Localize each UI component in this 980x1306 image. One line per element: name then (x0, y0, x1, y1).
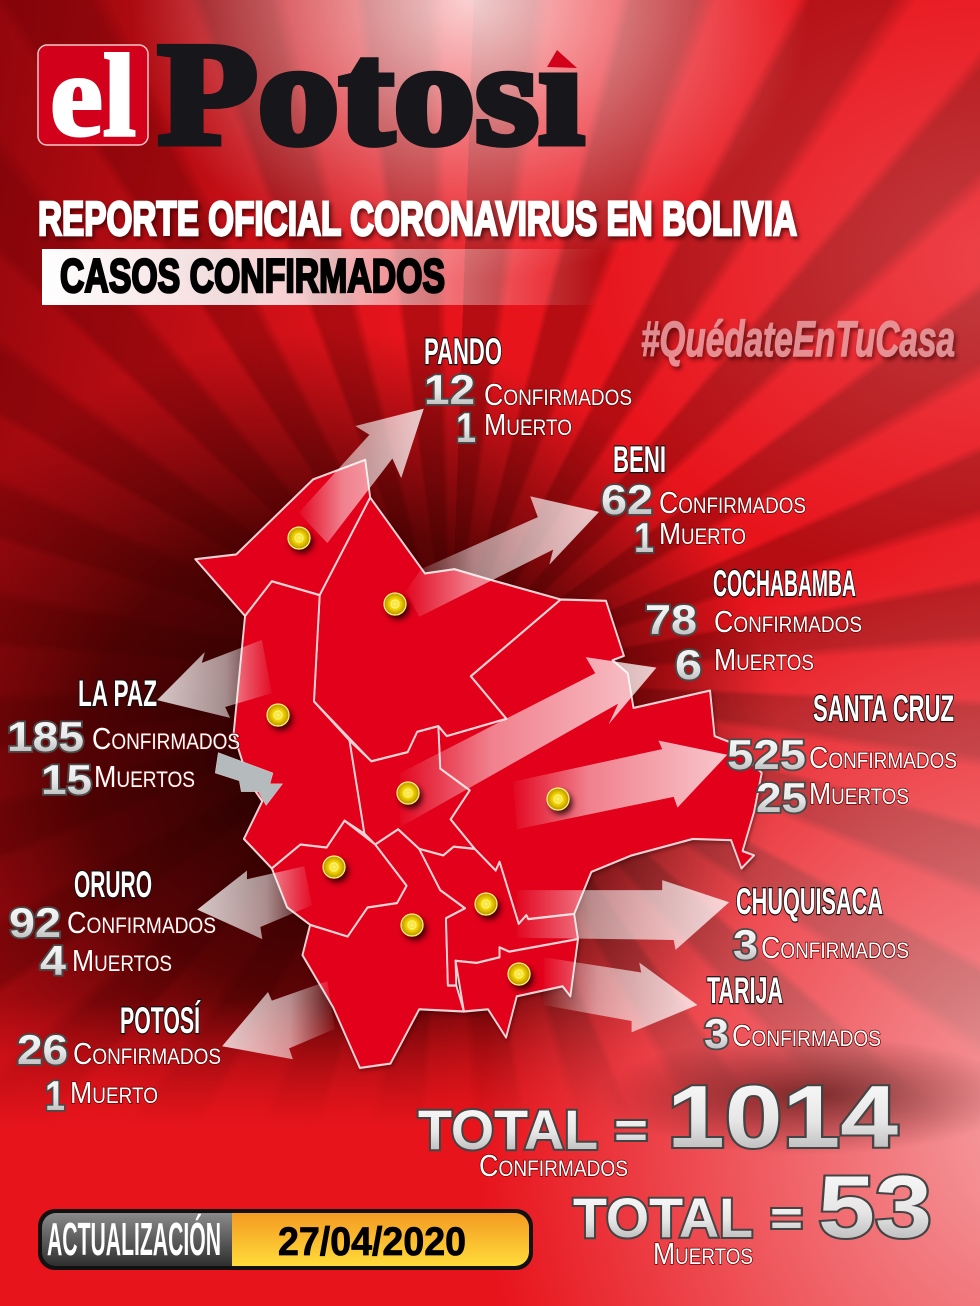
label: Cochabamba (645, 563, 862, 688)
label: Tarija: 3 (704, 1010, 729, 1057)
arrow: Oruro (197, 866, 312, 939)
label: Santa Cruz: 525 (727, 731, 806, 778)
region: Chuquisaca (419, 847, 578, 985)
label: Pando: Confirmados (484, 377, 632, 412)
marker: Pando (288, 527, 310, 549)
label: Cochabamba: COCHABAMBA (713, 563, 856, 604)
label: Oruro: Muertos (72, 943, 172, 978)
label: La Paz: 15 (41, 756, 92, 803)
label: Potosí: POTOSÍ (120, 1000, 201, 1041)
label: Pando: PANDO (424, 331, 502, 372)
region: Tarija (456, 939, 578, 1038)
label: Beni (601, 439, 806, 561)
label: Beni: 62 (601, 476, 653, 523)
total confirmed: 1014 (667, 1067, 898, 1166)
marker: Chuquisaca (475, 893, 497, 915)
label: Santa Cruz: Confirmados (809, 740, 957, 775)
label: Oruro: 4 (40, 937, 67, 984)
label: Chuquisaca: CHUQUISACA (736, 881, 883, 922)
label: Tarija (704, 970, 881, 1057)
label: Beni: BENI (613, 439, 666, 480)
total deaths: TOTAL (573, 1186, 753, 1249)
arrow: Santa Cruz (513, 740, 727, 829)
label: Potosí: Muerto (70, 1075, 158, 1110)
region: Oruro (272, 821, 407, 936)
logo: el Potosí (37, 44, 586, 148)
arrow: Chuquisaca (517, 880, 729, 950)
department markers (267, 527, 569, 985)
label: Tarija: Confirmados (732, 1018, 881, 1053)
region: Santa Cruz (438, 600, 762, 924)
label: La Paz (7, 673, 240, 803)
marker: Santa Cruz (547, 788, 569, 810)
update date bar: ACTUALIZACIÓN (47, 1213, 221, 1265)
marker: Potosí (401, 914, 423, 936)
label: Tarija: TARIJA (707, 970, 783, 1011)
total deaths: 53 (818, 1157, 932, 1256)
label: La Paz: 185 (7, 713, 84, 760)
region: La Paz (234, 581, 364, 868)
update date bar (38, 1209, 533, 1270)
marker: La Paz (267, 704, 289, 726)
label: Cochabamba: Confirmados (714, 604, 862, 639)
label: Oruro: Confirmados (67, 905, 216, 940)
marker: Beni (384, 593, 406, 615)
label: Oruro: ORURO (74, 864, 152, 905)
arrow: Beni (406, 496, 599, 617)
label: Santa Cruz (727, 688, 957, 821)
label: Oruro (9, 864, 216, 984)
label: Pando: 12 (424, 366, 475, 413)
label: Chuquisaca: Confirmados (761, 930, 909, 965)
total confirmed: = (614, 1102, 648, 1158)
map of Bolivia (195, 460, 762, 1068)
arrow: La Paz (157, 640, 272, 718)
arrow: Potosí (222, 981, 335, 1059)
logo: el Potosí: el (50, 30, 136, 161)
lake shape (215, 753, 283, 806)
region: Pando (195, 460, 370, 616)
label: Chuquisaca (733, 881, 909, 968)
arrow: Cochabamba (400, 657, 656, 827)
arrow: Tarija (544, 957, 697, 1032)
region: Cochabamba (350, 726, 475, 855)
total deaths (573, 1157, 932, 1271)
label: Pando: Muerto (484, 407, 572, 442)
total confirmed: TOTAL (418, 1098, 598, 1161)
total confirmed (418, 1067, 898, 1183)
label: La Paz: Confirmados (92, 721, 240, 756)
label: Potosí: 26 (17, 1026, 68, 1073)
label: Santa Cruz: 25 (756, 774, 807, 821)
label: Cochabamba: 78 (645, 596, 697, 643)
label: Potosí: Confirmados (73, 1036, 221, 1071)
arrows (157, 409, 729, 1059)
label: Cochabamba: Muertos (714, 642, 814, 677)
update date bar: 27/04/2020 (278, 1220, 466, 1264)
label: Beni: 1 (634, 514, 654, 561)
marker: Oruro (323, 856, 345, 878)
region: Beni (314, 498, 561, 761)
label: Pando: 1 (456, 404, 476, 451)
label: Oruro: 92 (9, 899, 61, 946)
label: Cochabamba: 6 (675, 641, 702, 688)
label: Potosí (17, 1000, 221, 1119)
total confirmed: Confirmados (479, 1148, 628, 1183)
marker: Cochabamba (397, 782, 419, 804)
marker: Tarija (508, 963, 530, 985)
subtitle band: CASOS CONFIRMADOS (60, 249, 445, 302)
label: La Paz: LA PAZ (78, 673, 157, 714)
label: Beni: Muerto (659, 516, 746, 551)
logo: el Potosí: Potosí (158, 13, 587, 175)
arrow: Pando (299, 409, 424, 543)
total deaths: Muertos (653, 1236, 753, 1271)
region: Potosí (302, 829, 465, 1068)
label: Pando (424, 331, 632, 451)
label: Santa Cruz: Muertos (809, 776, 909, 811)
label: La Paz: Muertos (94, 759, 195, 794)
label: Beni: Confirmados (659, 485, 806, 520)
total deaths: = (770, 1190, 803, 1246)
label: Chuquisaca: 3 (733, 921, 758, 968)
label: Potosí: 1 (45, 1072, 65, 1119)
